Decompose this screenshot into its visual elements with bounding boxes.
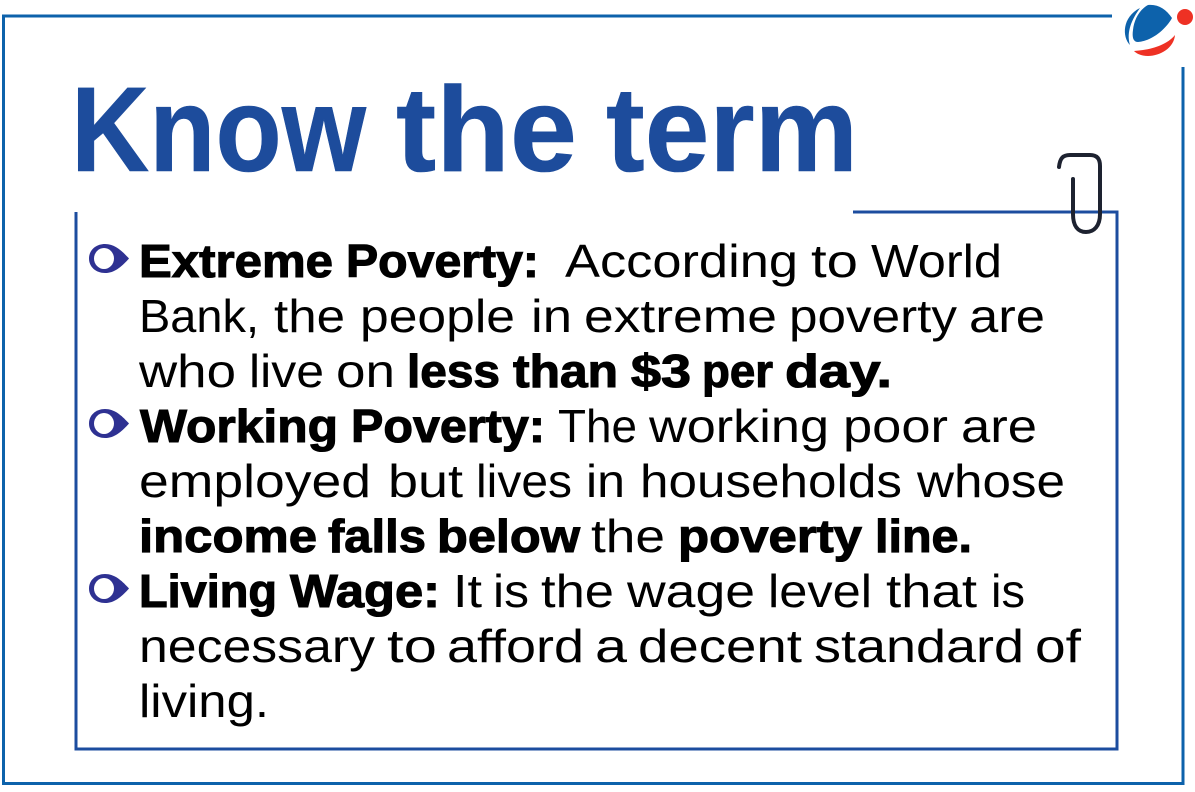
text: extreme poverty definition: less (407, 345, 500, 397)
bullet icon (89, 244, 129, 273)
title: Know (71, 61, 367, 197)
text: working poverty definition: falls (328, 510, 426, 562)
title (71, 61, 858, 197)
text: working poverty definition: line. (875, 510, 972, 562)
bullet icon (89, 409, 129, 438)
text: extreme poverty definition: on (336, 345, 395, 397)
text: living wage definition: Wage: (290, 565, 440, 617)
text: extreme poverty definition: $3 (631, 345, 691, 397)
text: working poverty definition: income (139, 510, 317, 562)
text: extreme poverty definition: the (274, 290, 345, 342)
text: extreme poverty definition: are (969, 290, 1045, 342)
icon: paperclip (1059, 155, 1100, 232)
text: living wage definition: standard (814, 620, 1024, 672)
text: working poverty definition: in (586, 455, 625, 507)
definitions panel border (76, 212, 1117, 749)
text: extreme poverty definition: who (138, 345, 236, 397)
text: extreme poverty definition: people (360, 290, 515, 342)
text: working poverty definition: working (648, 400, 829, 452)
text: extreme poverty definition: in (531, 290, 572, 342)
text: working poverty definition: lives (476, 455, 572, 507)
text: extreme poverty definition: Extreme (139, 235, 333, 287)
text: living wage definition: that (886, 565, 977, 617)
logo (1125, 5, 1193, 56)
text: working poverty definition: are (961, 400, 1037, 452)
text: living wage definition: of (1035, 620, 1081, 672)
text: working poverty definition: poverty (678, 510, 862, 562)
text: living wage definition: wage (626, 565, 755, 617)
text: living wage definition: decent (638, 620, 802, 672)
term: living wage (89, 565, 1081, 727)
text: working poverty definition: employed (139, 455, 371, 507)
bullet icon (89, 574, 129, 603)
text: living wage definition: is (991, 565, 1025, 617)
text: living wage definition: the (541, 565, 614, 617)
text: working poverty definition: Working (140, 400, 338, 452)
text: extreme poverty definition: Poverty: (346, 235, 539, 287)
text: working poverty definition: households (640, 455, 902, 507)
text: working poverty definition: the (591, 510, 665, 562)
text: extreme poverty definition: extreme (584, 290, 777, 342)
text: living wage definition: level (768, 565, 872, 617)
text: extreme poverty definition: poverty (789, 290, 957, 342)
text: living wage definition: to (387, 620, 437, 672)
text: extreme poverty definition: per (702, 345, 773, 397)
text: extreme poverty definition: to (811, 235, 858, 287)
text: working poverty definition: below (437, 510, 580, 562)
text: working poverty definition: whose (916, 455, 1065, 507)
text: extreme poverty definition: World (871, 235, 1002, 287)
text: working poverty definition: poor (843, 400, 948, 452)
text: living wage definition: It (453, 565, 482, 617)
text: extreme poverty definition: Bank, (139, 290, 259, 342)
text: working poverty definition: Poverty: (351, 400, 545, 452)
text: extreme poverty definition: According (565, 235, 798, 287)
text: living wage definition: Living (139, 565, 277, 617)
text: working poverty definition (139, 400, 1065, 562)
text: extreme poverty definition: live (249, 345, 324, 397)
text: extreme poverty definition: than (513, 345, 618, 397)
text: living wage definition: necessary (139, 620, 375, 672)
text: working poverty definition: The (558, 400, 637, 452)
text: extreme poverty definition: day. (785, 345, 892, 397)
text: working poverty definition: but (388, 455, 463, 507)
text: living wage definition (139, 565, 1081, 727)
text: living wage definition: afford (447, 620, 584, 672)
term: extreme poverty (89, 235, 1045, 397)
term: working poverty (89, 400, 1065, 562)
text: extreme poverty definition (138, 235, 1045, 397)
text: living wage definition: a (595, 620, 628, 672)
title: term (606, 61, 858, 197)
text: living wage definition: is (493, 565, 529, 617)
title: the (396, 61, 577, 197)
text: living wage definition: living. (139, 675, 269, 727)
